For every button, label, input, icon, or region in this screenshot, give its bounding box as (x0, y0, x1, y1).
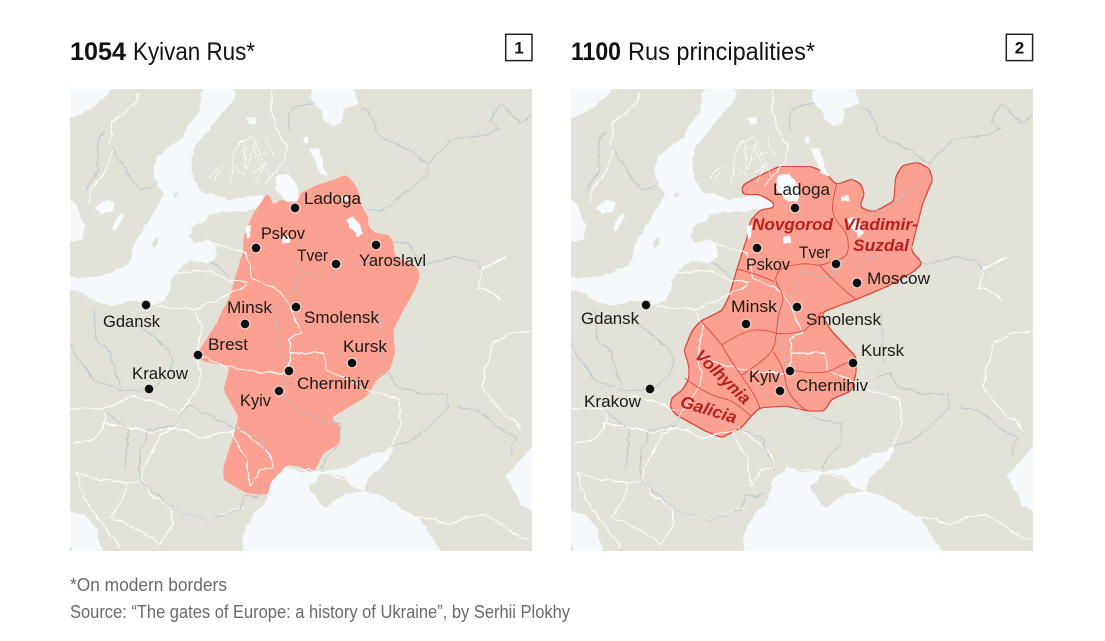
footnote and source (70, 575, 570, 622)
territory: principalities outline (669, 162, 933, 438)
principality names: Novgorod (752, 215, 834, 234)
number badge 1 (506, 34, 532, 61)
city labels and dots (581, 180, 931, 411)
city labels and dots: Krakow (132, 364, 189, 383)
city labels and dots: Kyiv (749, 367, 780, 386)
city labels and dots: Minsk (731, 297, 778, 316)
territory: Kyivan Rus (195, 174, 420, 495)
city labels and dots: Gdansk (103, 312, 160, 331)
city labels and dots: Chernihiv (297, 374, 369, 393)
city labels and dots (103, 189, 426, 410)
city labels and dots: Chernihiv (796, 376, 868, 395)
city labels and dots: Pskov (261, 224, 305, 243)
city labels and dots: Kyiv (240, 391, 271, 410)
city labels and dots: Minsk (227, 298, 272, 317)
city labels and dots: Pskov (746, 255, 790, 274)
map: Rus principalities (571, 89, 1033, 551)
heading: 1054 Kyivan Rus: 1054 (70, 38, 126, 66)
city labels and dots: Tver (297, 246, 328, 265)
city labels and dots: Yaroslavl (359, 251, 426, 270)
city labels and dots: Ladoga (773, 180, 831, 199)
principality boundaries (685, 184, 857, 417)
heading: 1054 Kyivan Rus (70, 38, 255, 66)
city labels and dots: Tver (799, 243, 830, 262)
map: Kyivan Rus territory (70, 89, 532, 551)
principality names: Galicia (678, 392, 739, 427)
heading: 1100 Rus principalities: 1100 (571, 38, 621, 66)
number badge 2 (1006, 34, 1033, 61)
city labels and dots: Krakow (584, 392, 642, 411)
heading: 1054 Kyivan Rus: Kyivan Rus* (133, 38, 255, 66)
city labels and dots: Smolensk (806, 310, 882, 329)
principality names: Vladimir- (843, 215, 918, 234)
city labels and dots: Kursk (861, 341, 904, 360)
city labels and dots: Kursk (343, 337, 387, 356)
city labels and dots: Smolensk (304, 308, 380, 327)
number badge 2: 2 (1015, 38, 1024, 58)
city labels and dots: Gdansk (581, 309, 639, 328)
heading: 1100 Rus principalities: Rus principalities* (628, 38, 815, 66)
principality names: Volhynia (691, 346, 755, 408)
principality names: Suzdal (853, 236, 910, 255)
panel: map 1, 1054 Kyivan Rus (60, 34, 560, 580)
city labels and dots: Moscow (867, 269, 931, 288)
panel: map 2, 1100 Rus principalities (561, 34, 1061, 580)
number badge 1: 1 (514, 38, 524, 58)
footnote and source: Source: “The gates of Europe: a history of Ukraine”, by Serhii Plokhy (70, 602, 570, 622)
footnote and source: *On modern borders (70, 575, 227, 595)
principality names (678, 215, 918, 427)
city labels and dots: Ladoga (304, 189, 362, 208)
city labels and dots: Brest (208, 335, 248, 354)
